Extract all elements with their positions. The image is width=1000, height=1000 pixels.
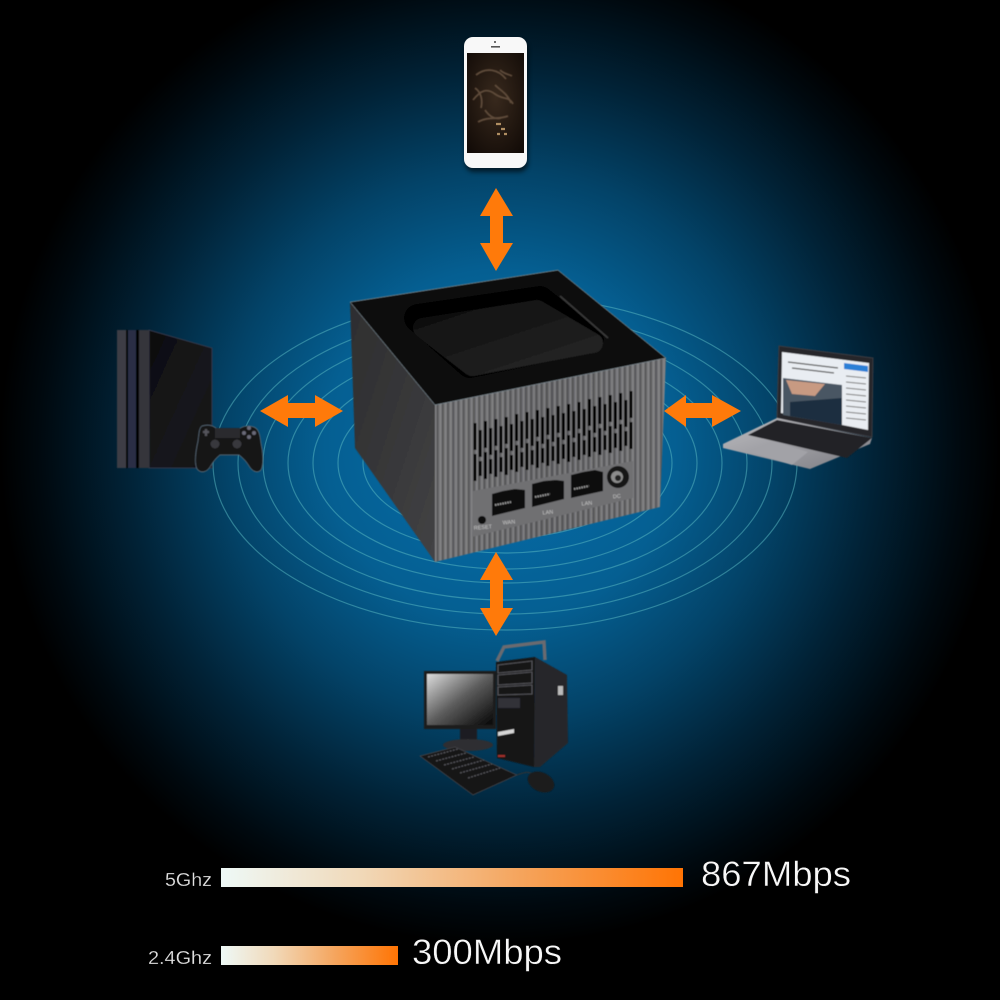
- port labels: LAN: [581, 501, 593, 507]
- phone shadow: [465, 41, 528, 172]
- phone speaker: [491, 46, 500, 48]
- tower panel: [498, 698, 520, 708]
- mouse cable: [517, 772, 534, 775]
- port labels: LAN: [542, 510, 554, 516]
- tower side: [534, 657, 568, 767]
- tower badge: [498, 729, 514, 736]
- router top pad: [423, 310, 593, 366]
- speed chart: 2.4Ghz: [148, 933, 562, 972]
- laptop photo detail: [786, 380, 825, 396]
- laptop screen photo: [783, 378, 842, 425]
- laptop photo foreground: [790, 398, 842, 425]
- monitor screen: [427, 674, 493, 725]
- port labels: WAN: [502, 519, 515, 527]
- arrow: right: [664, 395, 741, 427]
- router top face: [350, 270, 666, 405]
- concentric signal rings: [213, 296, 797, 630]
- monitor stand: [460, 729, 477, 743]
- phone body: [464, 37, 527, 168]
- arrow: bottom: [480, 552, 513, 636]
- laptop text lines: [788, 362, 838, 373]
- router left face: [350, 302, 435, 562]
- laptop lid: [777, 346, 873, 437]
- router top pad recess: [418, 300, 590, 364]
- arrow: top: [480, 188, 513, 271]
- router vent slits: [475, 391, 631, 481]
- phone screen highlights: [496, 124, 507, 134]
- phone camera: [494, 41, 496, 43]
- keyboard: [420, 747, 517, 795]
- LAN port 1: [532, 480, 564, 507]
- console side panel: [149, 330, 212, 468]
- tower red logo: [498, 755, 505, 757]
- value: 300Mbps: 300Mbps: [412, 933, 562, 972]
- value: 867Mbps: 867Mbps: [701, 855, 851, 894]
- mouse: [524, 767, 558, 797]
- arrow: left: [260, 395, 343, 427]
- icon: laptop: [723, 346, 873, 469]
- tower handle: [497, 642, 545, 661]
- icon: game console: [117, 330, 263, 472]
- laptop trackpad: [750, 441, 808, 465]
- monitor base: [443, 739, 493, 751]
- DC jack: [607, 466, 629, 488]
- router front ribs: [435, 358, 666, 562]
- label: 5Ghz: 5Ghz: [165, 870, 212, 890]
- router port plate: [472, 461, 633, 537]
- label: 2.4Ghz: 2.4Ghz: [148, 948, 212, 968]
- WAN port: [492, 489, 525, 516]
- port labels: DC: [613, 494, 621, 500]
- port labels: [474, 494, 621, 532]
- router front face: [435, 358, 666, 562]
- controller d-pad: [203, 429, 209, 436]
- LAN port 2: [571, 470, 603, 498]
- reset button: [478, 516, 486, 524]
- game controller: [195, 425, 263, 472]
- bar: 5Ghz: [221, 868, 683, 887]
- console front strip 3: [139, 330, 149, 468]
- laptop chat sidebar: [844, 363, 868, 420]
- laptop screen: [781, 352, 869, 430]
- bar: 2.4Ghz: [221, 946, 398, 965]
- tower drive bays: [498, 661, 532, 695]
- phone screen: [467, 53, 524, 153]
- icon: desktop computer: [420, 642, 568, 797]
- controller touchpad: [215, 428, 240, 438]
- console front strip 1: [117, 330, 126, 468]
- monitor bezel: [424, 671, 496, 729]
- console gap: [126, 330, 128, 468]
- router device: [350, 270, 666, 562]
- controller buttons: [242, 426, 256, 439]
- console gap 2: [136, 330, 139, 468]
- icon: smartphone: [464, 37, 528, 172]
- tower front: [496, 657, 535, 767]
- router pad highlight: [560, 296, 608, 338]
- laptop base: [723, 418, 872, 469]
- controller sticks: [210, 440, 242, 448]
- speed chart: 5Ghz: [165, 855, 851, 894]
- console front strip 2: [128, 330, 136, 468]
- laptop keyboard: [748, 420, 872, 458]
- keyboard keys: [428, 749, 500, 778]
- phone screen artwork: [473, 70, 513, 122]
- tower side vent: [558, 686, 563, 695]
- port labels: RESET: [474, 524, 493, 532]
